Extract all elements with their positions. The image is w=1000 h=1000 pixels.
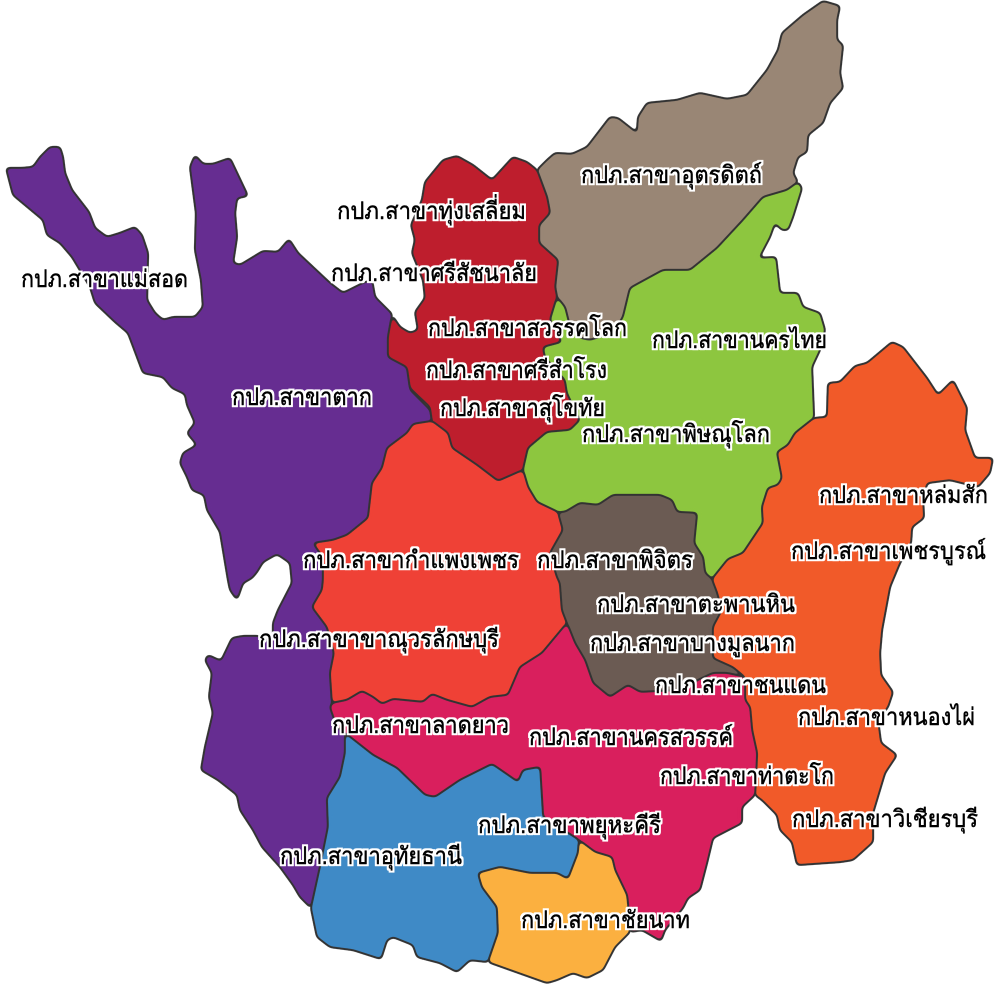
label: Uthai Thani: กปภ.สาขาอุทัยธานี — [280, 843, 462, 871]
region: Tak / Mae Sot purple — [6, 147, 432, 908]
label: Phayuha Khiri: กปภ.สาขาพยุหะคีรี — [478, 812, 661, 840]
region: Phichit dark brown — [550, 495, 745, 697]
label: Chon Daen: กปภ.สาขาชนแดน — [655, 672, 826, 699]
label: Si Satchanalai: กปภ.สาขาศรีสัชนาลัย — [331, 260, 537, 287]
label: Uttaradit: กปภ.สาขาอุตรดิตถ์ — [581, 161, 762, 190]
label: Thung Saliam: กปภ.สาขาทุ่งเสลี่ยม — [337, 194, 526, 226]
label: Nong Phai: กปภ.สาขาหนองไผ่ — [798, 703, 975, 731]
branch labels — [21, 161, 988, 934]
label: Lom Sak: กปภ.สาขาหล่มสัก — [819, 482, 988, 509]
label: Tak: กปภ.สาขาตาก — [232, 384, 372, 411]
region: Sukhothai dark red — [388, 156, 580, 481]
label: Tha Tako: กปภ.สาขาท่าตะโก — [660, 762, 834, 790]
label: Nakhon Thai: กปภ.สาขานครไทย — [652, 326, 827, 354]
label: Si Samrong: กปภ.สาขาศรีสำโรง — [426, 356, 607, 384]
label: Nakhon Sawan: กปภ.สาขานครสวรรค์ — [529, 723, 733, 751]
label: Chai Nat: กปภ.สาขาชัยนาท — [521, 907, 690, 934]
label: Taphan Hin: กปภ.สาขาตะพานหิน — [597, 591, 795, 618]
region: Chai Nat yellow — [478, 840, 630, 983]
label: Kamphaeng Phet: กปภ.สาขากำแพงเพชร — [303, 547, 519, 574]
region: Phetchabun orange — [712, 342, 993, 865]
label: Sawankhalok: กปภ.สาขาสวรรคโลก — [428, 314, 627, 342]
label: Khanu Woralaksaburi: กปภ.สาขาขาณุวรลักษบุรี — [259, 626, 499, 654]
label: Wichian Buri: กปภ.สาขาวิเชียรบุรี — [792, 806, 978, 834]
region: Kamphaeng Phet coral — [312, 421, 567, 707]
region: Uttaradit brown — [537, 1, 843, 340]
region: Phitsanulok green — [523, 182, 825, 579]
label: Phetchabun: กปภ.สาขาเพชรบูรณ์ — [791, 537, 986, 566]
region: Nakhon Sawan pink — [330, 623, 757, 941]
label: Sukhothai: กปภ.สาขาสุโขทัย — [440, 394, 605, 423]
region: Uthai Thani blue — [311, 733, 579, 972]
label: Phitsanulok: กปภ.สาขาพิษณุโลก — [582, 420, 770, 449]
label: Lat Yao: กปภ.สาขาลาดยาว — [332, 712, 509, 739]
label: Mae Sot: กปภ.สาขาแม่สอด — [21, 266, 188, 293]
label: Bang Mun Nak: กปภ.สาขาบางมูลนาก — [590, 630, 795, 658]
label: Phichit: กปภ.สาขาพิจิตร — [537, 547, 693, 574]
